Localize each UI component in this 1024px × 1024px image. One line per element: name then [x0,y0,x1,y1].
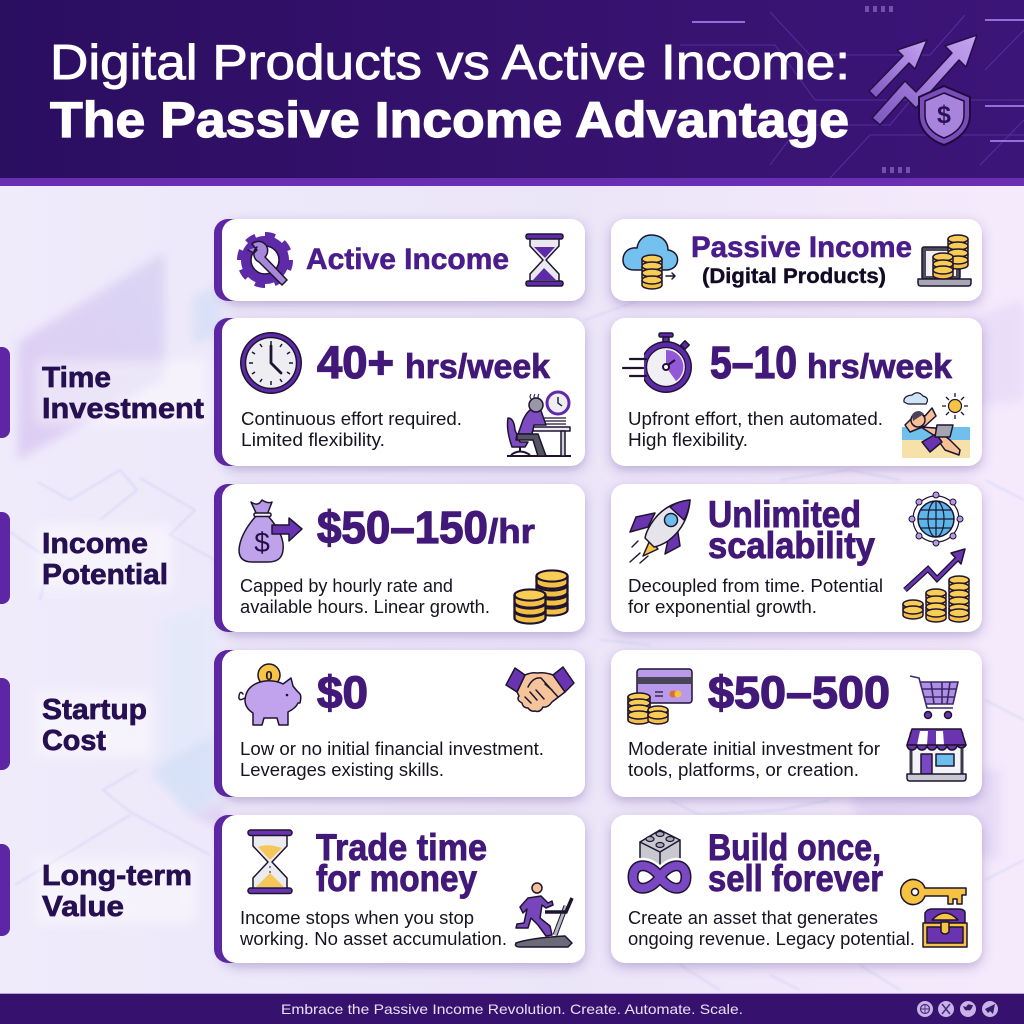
side tab: row 4 [0,844,10,936]
panel: passive income potential [611,484,982,632]
value: 40+ hrs/week: 40+ [317,337,394,388]
description: Decoupled from time. Potential [628,575,883,596]
passive income label: (Digital Products) [702,265,886,288]
description: Leverages existing skills. [240,759,444,780]
row label: income potential [36,526,172,591]
icon: shopping cart [910,676,958,718]
row label: long-term value [36,858,196,923]
icon: cloud with coins [623,235,678,289]
value: 5-10 hrs/week: 5–10 [710,337,797,388]
description [240,738,544,780]
row label: time investment: Investment [42,393,204,425]
icon: gear and wrench [240,235,290,285]
row label: startup cost: Startup [42,694,147,726]
row label: time investment: Time [42,362,111,394]
icon: growth chart and coin stacks [903,549,969,622]
row label: income potential: Potential [42,559,168,591]
description [241,408,462,450]
panel: active time investment [214,318,585,466]
description: Capped by hourly rate and [240,575,453,596]
description: Create an asset that generates [628,907,878,928]
icon: gold key [901,879,966,905]
description: Limited flexibility. [241,429,385,450]
value: build once, sell forever: sell forever [708,858,883,899]
description: ongoing revenue. Legacy potential. [628,928,915,949]
column header: passive income [611,219,982,301]
icon: hourglass [526,234,563,286]
title [50,36,850,148]
value: 40+ hrs/week [317,337,550,388]
value: $50-150/hr: /hr [488,513,535,551]
value: $50-150/hr: $50–150 [317,502,488,553]
column header: active income [214,219,585,301]
description: Low or no initial financial investment. [240,738,544,759]
description: working. No asset accumulation. [239,928,507,949]
social icons [917,1001,998,1017]
icon: rocket [630,500,690,563]
icon: stopwatch [623,333,692,393]
row label: income potential: Income [42,528,148,560]
value: $0: $0 [317,667,368,718]
icon: rising arrows and shield: $ [937,101,951,129]
description: available hours. Linear growth. [240,596,490,617]
row label: time investment [36,360,206,425]
icon: rising arrows and shield [869,35,977,145]
footer text: Embrace the Passive Income Revolution. Create. Automate. Scale. [281,1001,743,1017]
icon: large hourglass [248,830,292,894]
panel: passive time investment [611,318,982,466]
icon: network globe [909,492,963,546]
icon: relaxing on the beach with laptop [902,393,970,458]
icon: piggy bank: 0 [265,668,273,683]
value: trade time for money [316,827,487,899]
panel: active long-term value [214,815,585,963]
description [240,575,490,617]
description: for exponential growth. [628,596,817,617]
value: $50-500: $50–500 [708,667,890,718]
value: build once, sell forever [708,827,883,899]
value: unlimited scalability [708,494,875,566]
icon: money bag with arrow: $ [254,527,270,558]
description: Continuous effort required. [241,408,462,429]
value: trade time for money: Trade time [316,827,487,868]
value: unlimited scalability: scalability [708,525,875,566]
icon: online store laptop [907,729,966,781]
description: High flexibility. [628,429,748,450]
footer bar [0,993,1024,1024]
value: 40+ hrs/week: hrs/week [405,348,550,386]
icon: money bag with arrow [239,500,302,562]
active income label: Active Income [306,243,509,276]
description: Upfront effort, then automated. [628,408,883,429]
passive income label [691,231,912,288]
description [628,408,883,450]
description: Income stops when you stop [240,907,474,928]
value: trade time for money: for money [316,858,477,899]
icon: credit card and coins [628,669,692,724]
icon: laptop with coins [918,235,971,286]
description [628,738,880,780]
value: unlimited scalability: Unlimited [708,494,861,535]
description [239,907,507,949]
value: build once, sell forever: Build once, [708,827,881,868]
row label: long-term value: Long-term [42,860,192,892]
row label: long-term value: Value [42,891,124,923]
panel: active startup cost [214,650,585,797]
description [628,907,915,949]
icon: tired worker at desk [507,392,571,456]
row label: startup cost [36,692,152,757]
panel: passive long-term value [611,815,982,963]
description [628,575,883,617]
header banner [0,0,1024,186]
icon: wall clock [240,332,302,394]
icon: piggy bank [239,664,301,725]
side tab: row 2 [0,512,10,604]
panel: active income potential [214,484,585,632]
description: tools, platforms, or creation. [628,759,859,780]
icon: treasure chest [923,909,967,947]
value: 5-10 hrs/week [710,337,952,388]
icon: handshake [506,667,574,712]
icon: building block and infinity [633,830,686,888]
passive income label: Passive Income [691,231,912,264]
title: Digital Products vs Active Income: [50,36,850,90]
description: Moderate initial investment for [628,738,880,759]
icon: stacked gold coins [514,570,568,624]
icon: person on treadmill [516,883,572,947]
title: The Passive Income Advantage [50,92,849,148]
side tab: row 1 [0,347,10,438]
row label: startup cost: Cost [42,725,106,757]
side tab: row 3 [0,678,10,770]
value: 5-10 hrs/week: hrs/week [807,348,952,386]
panel: passive startup cost [611,650,982,797]
